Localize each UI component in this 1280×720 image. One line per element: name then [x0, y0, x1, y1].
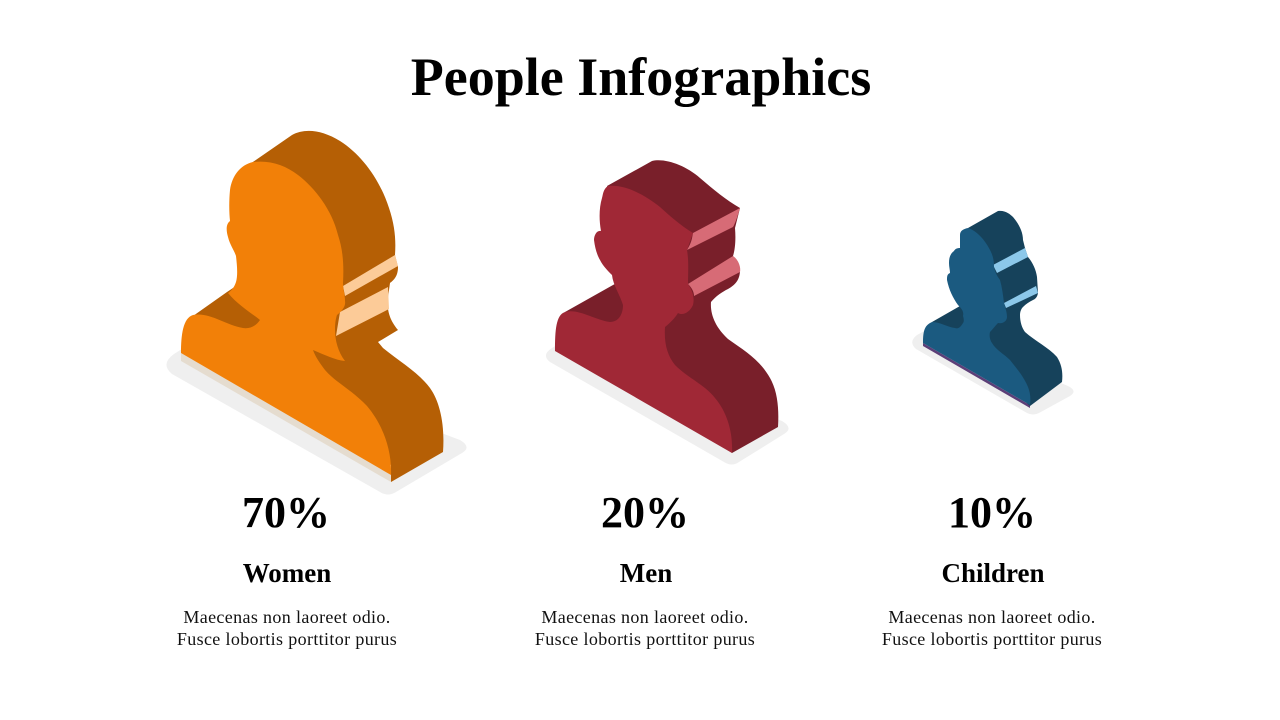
- text: children description: Maecenas non laoreet odio.: [888, 607, 1096, 627]
- text: women description: Maecenas non laoreet odio.: [183, 607, 391, 627]
- icon: men figure: [546, 160, 789, 464]
- icon: children figure: [912, 211, 1074, 414]
- label: children: Children: [941, 558, 1045, 588]
- stat: women percentage: 70%: [242, 488, 330, 537]
- text: men description: Maecenas non laoreet odio.: [541, 607, 749, 627]
- text: women description: [177, 607, 397, 649]
- stat: men percentage: 20%: [601, 488, 689, 537]
- text: men description: [535, 607, 755, 649]
- label: women: Women: [243, 558, 331, 588]
- text: children description: Fusce lobortis porttitor purus: [882, 628, 1102, 648]
- icon: women figure: [166, 131, 467, 494]
- text: children description: [882, 607, 1102, 649]
- label: men: Men: [620, 558, 672, 588]
- title: People Infographics: [411, 47, 871, 107]
- text: men description: Fusce lobortis porttitor purus: [535, 628, 755, 648]
- stat: children percentage: 10%: [948, 488, 1036, 537]
- text: women description: Fusce lobortis porttitor purus: [177, 628, 397, 648]
